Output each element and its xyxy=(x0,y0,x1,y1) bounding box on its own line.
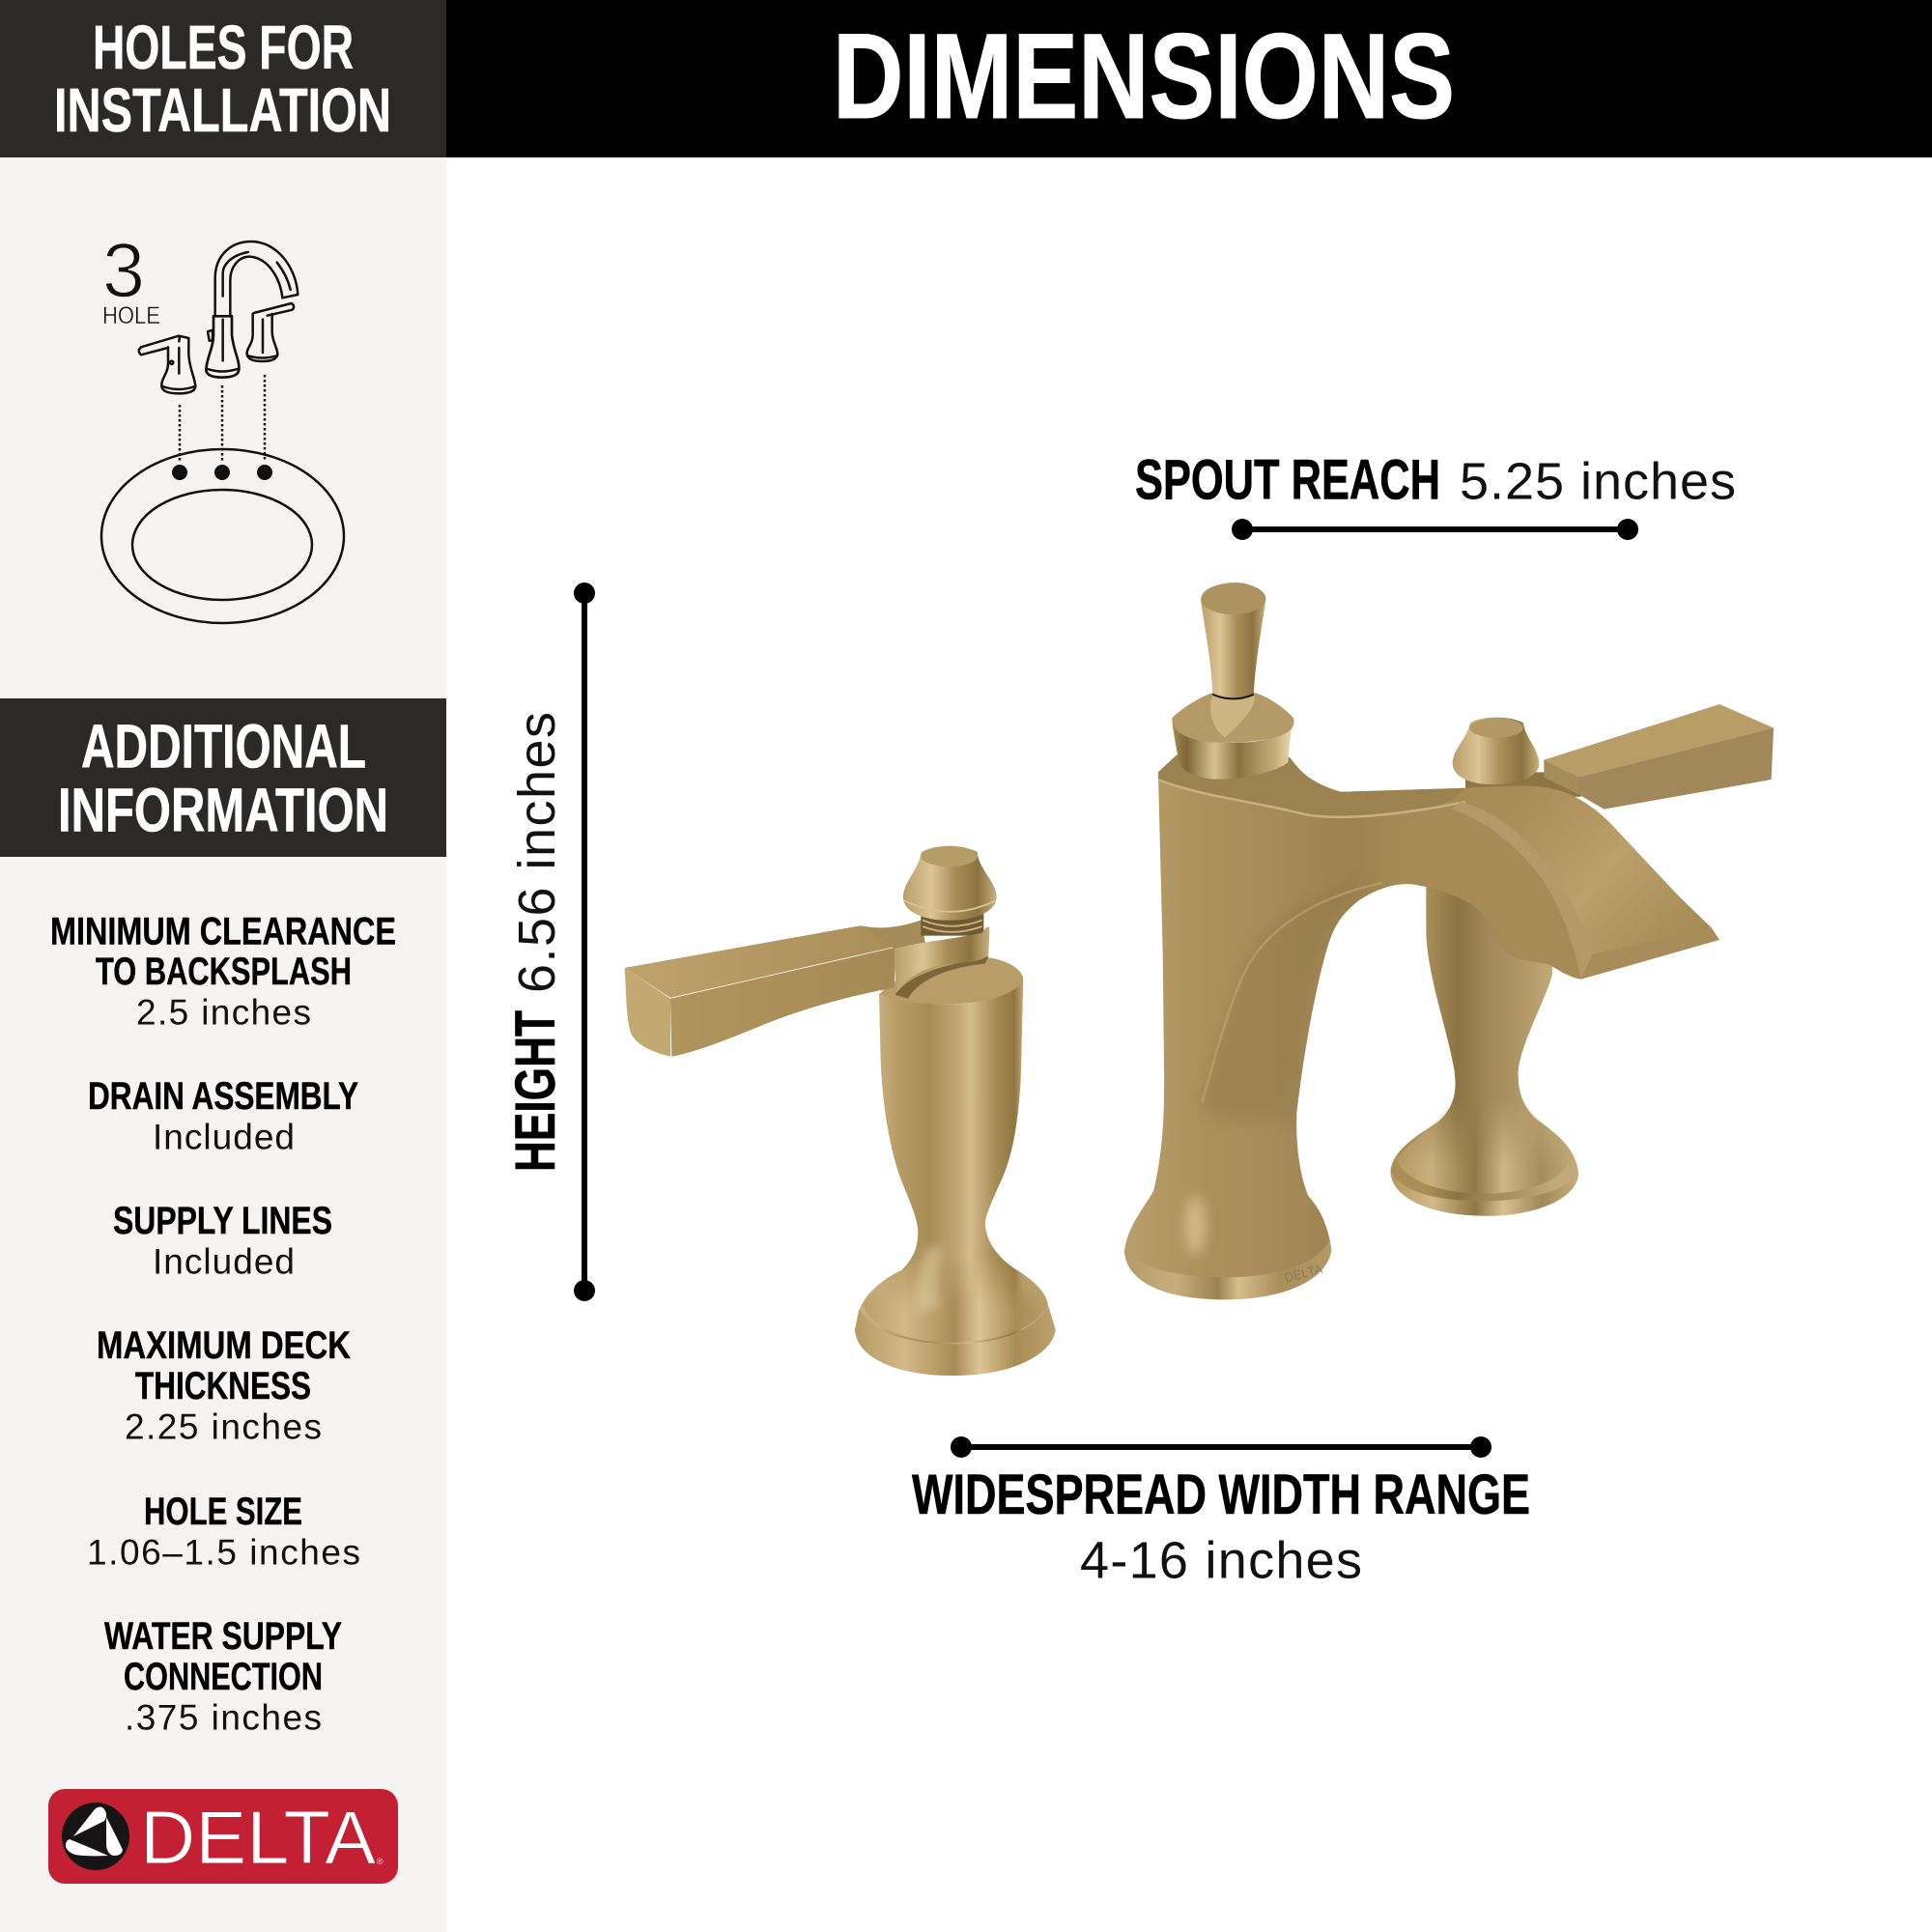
label: delta engraved: DELTA xyxy=(1284,1261,1324,1285)
spec: supply lines: SUPPLY LINES xyxy=(113,1200,332,1242)
hole count label: 3 xyxy=(102,227,145,313)
dimension: height xyxy=(504,582,595,1301)
icon: line drawing faucet xyxy=(139,242,298,393)
title: dimensions: DIMENSIONS xyxy=(833,10,1455,144)
title: dimensions xyxy=(446,0,1932,157)
spec: drain assembly: Included xyxy=(153,1117,295,1157)
dimension: spout reach xyxy=(1135,448,1736,540)
heading: holes for installation xyxy=(0,0,446,157)
spec: hole size xyxy=(87,1491,360,1573)
heading: additional information: ADDITIONAL xyxy=(81,711,366,781)
spout upper bevel xyxy=(1158,755,1465,817)
dimension: spout reach: SPOUT REACH xyxy=(1135,448,1440,512)
heading: additional information: INFORMATION xyxy=(58,775,388,844)
heading: additional information xyxy=(0,698,446,857)
dimension: widespread width range xyxy=(912,1436,1530,1590)
spec: supply lines: Included xyxy=(153,1242,295,1281)
spec: minimum clearance: MINIMUM CLEARANCE xyxy=(50,910,396,952)
spec: hole size: 1.06–1.5 inches xyxy=(87,1532,360,1573)
spec: maximum deck thickness: 2.25 inches xyxy=(125,1406,322,1447)
main body xyxy=(1124,755,1719,1299)
spec: drain assembly: DRAIN ASSEMBLY xyxy=(88,1075,358,1118)
spec: minimum clearance: 2.5 inches xyxy=(136,993,311,1032)
dimension: widespread width range: WIDESPREAD WIDTH RANGE xyxy=(912,1463,1530,1526)
logo: delta: DELTA xyxy=(140,1795,376,1880)
foot of main body xyxy=(1124,1240,1331,1299)
icon: 3 hole faucet and sink diagram xyxy=(101,227,344,623)
dimension: spout reach: 5.25 inches xyxy=(1460,452,1736,510)
pop-up rod xyxy=(1201,582,1265,698)
spout face xyxy=(1465,786,1711,954)
dimension: widespread width range: 4-16 inches xyxy=(1080,1532,1362,1590)
spec: minimum clearance: TO BACKSPLASH xyxy=(96,951,352,993)
spec: water supply connection: .375 inches xyxy=(125,1698,322,1737)
hole count label: HOLE xyxy=(102,302,160,329)
inner arch shading xyxy=(1206,918,1306,1121)
spec: water supply connection xyxy=(104,1615,342,1737)
spec: maximum deck thickness: THICKNESS xyxy=(135,1365,311,1407)
product: left handle xyxy=(625,846,1056,1376)
dimension: height: 6.56 inches xyxy=(508,712,566,993)
dimension: height: HEIGHT xyxy=(504,1010,567,1172)
spec: minimum clearance xyxy=(50,910,396,1032)
arch ridge xyxy=(1202,883,1382,1102)
heading: holes for installation: HOLES FOR xyxy=(93,13,354,82)
logo: delta xyxy=(48,1789,398,1884)
spec: water supply connection: CONNECTION xyxy=(124,1656,323,1698)
pop-up collar xyxy=(1172,693,1294,780)
rear lever handle xyxy=(1453,704,1774,810)
product: centre faucet with spout and rear handle xyxy=(1124,582,1774,1299)
spec: maximum deck thickness: MAXIMUM DECK xyxy=(97,1324,351,1367)
spout tip xyxy=(1581,927,1719,980)
spec: maximum deck thickness xyxy=(97,1324,351,1447)
spec: supply lines xyxy=(113,1200,332,1281)
sidebar background xyxy=(0,0,446,1932)
hole count label xyxy=(102,227,160,329)
logo: delta: ® xyxy=(377,1857,384,1866)
spec: water supply connection: WATER SUPPLY xyxy=(104,1615,342,1658)
spec: drain assembly xyxy=(88,1075,358,1157)
icon: sink xyxy=(101,375,344,623)
spec: hole size: HOLE SIZE xyxy=(144,1491,302,1533)
heading: holes for installation: INSTALLATION xyxy=(54,75,391,145)
rear handle body xyxy=(1391,876,1578,1216)
